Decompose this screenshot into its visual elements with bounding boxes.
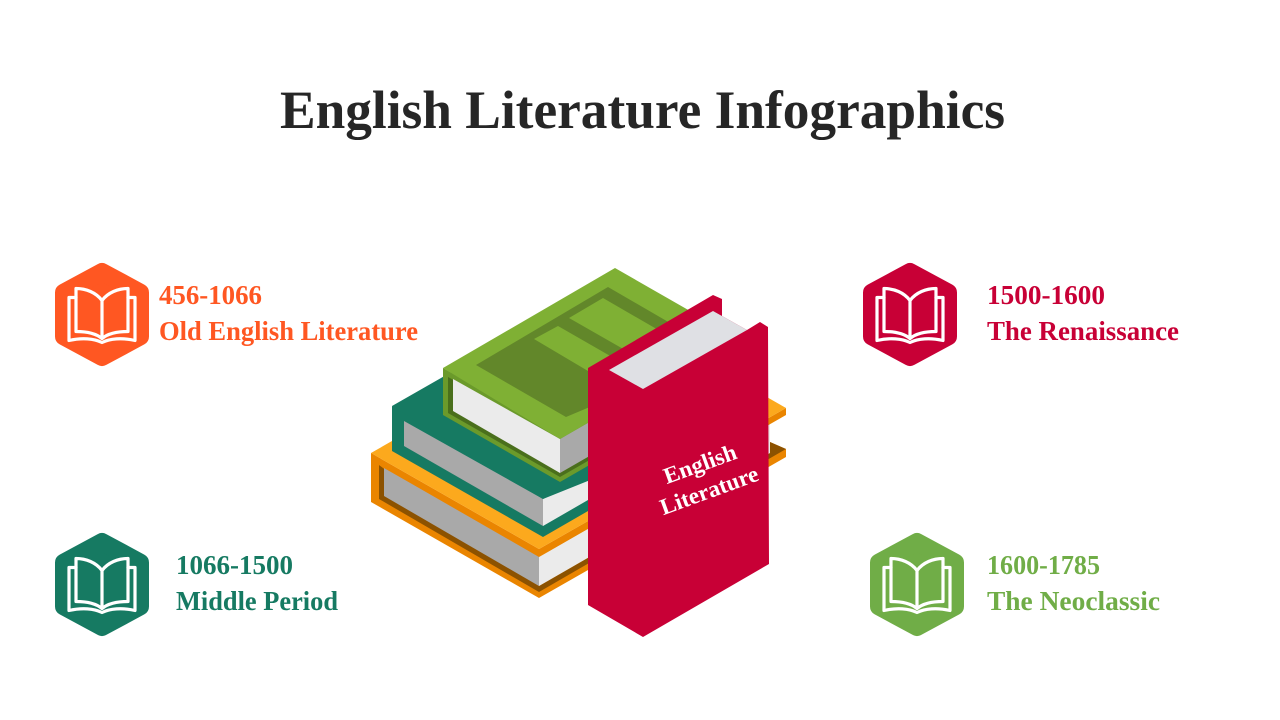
- icon: orange hexagon book: [64, 272, 140, 357]
- icon: crimson hexagon book: [872, 272, 948, 357]
- date label: 456-1066: [159, 280, 262, 310]
- item: Middle Period: [64, 542, 338, 627]
- period label: The Neoclassic: [987, 586, 1160, 616]
- illustration: stack of books: [371, 268, 786, 637]
- spine label: Literature: [656, 461, 762, 520]
- date label: 1600-1785: [987, 550, 1100, 580]
- icon: green hexagon book: [879, 542, 955, 627]
- icon: teal hexagon book: [64, 542, 140, 627]
- date label: 1066-1500: [176, 550, 293, 580]
- red upright book: [588, 295, 769, 637]
- title: English Literature Infographics: [280, 80, 1005, 140]
- orange book: [371, 312, 786, 598]
- spine label: [647, 435, 762, 520]
- spine label: English: [660, 439, 740, 489]
- teal book: [392, 362, 640, 537]
- date label: 1500-1600: [987, 280, 1105, 310]
- item: The Renaissance: [872, 272, 1179, 357]
- period label: Middle Period: [176, 586, 338, 616]
- item: The Neoclassic: [879, 542, 1160, 627]
- period label: The Renaissance: [987, 316, 1179, 346]
- period label: Old English Literature: [159, 316, 418, 346]
- item: Old English Literature: [64, 272, 418, 357]
- green book: [443, 268, 732, 482]
